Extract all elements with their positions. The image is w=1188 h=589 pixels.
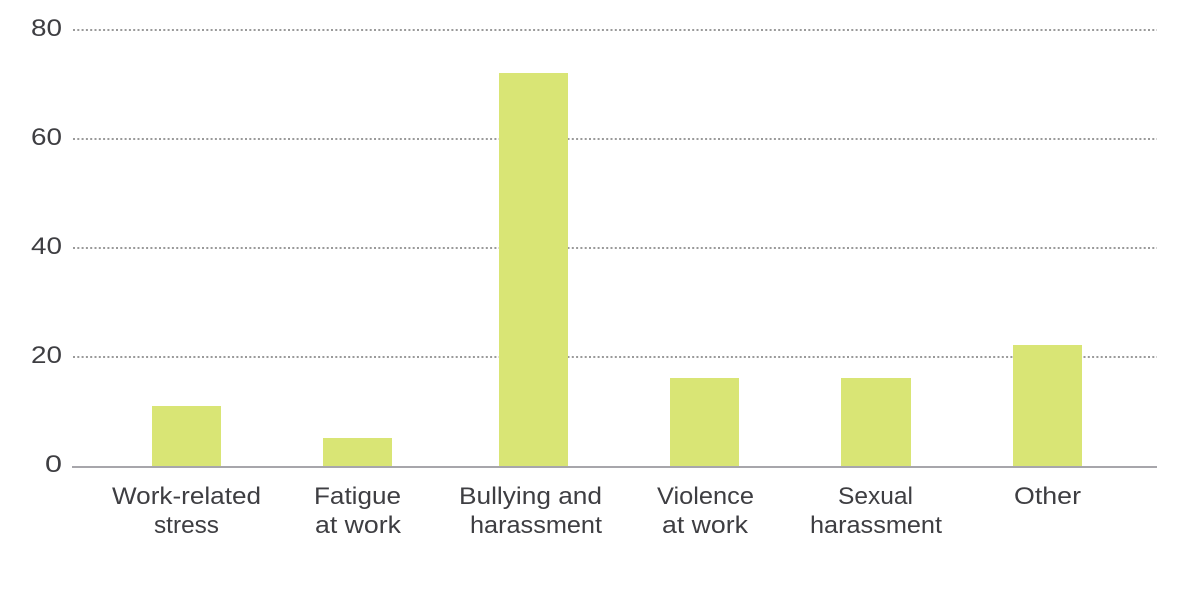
y-axis labels xyxy=(31,15,62,478)
x-axis labels: Work-related xyxy=(112,483,261,510)
bars xyxy=(152,73,1082,466)
x-axis labels: at work xyxy=(662,512,749,539)
y-axis labels: 20 xyxy=(31,342,62,369)
x-axis labels: Other xyxy=(1014,483,1081,510)
y-axis labels: 40 xyxy=(31,233,62,260)
x-axis labels: harassment xyxy=(810,512,942,539)
y-axis labels: 0 xyxy=(45,451,62,478)
x-axis labels: Bullying and xyxy=(459,483,602,510)
x-axis labels: harassment xyxy=(470,512,602,539)
y-axis labels: 80 xyxy=(31,15,62,42)
x-axis labels: Sexual xyxy=(838,483,913,510)
x-axis labels: at work xyxy=(315,512,402,539)
x-axis labels xyxy=(112,483,1081,539)
x-axis labels: Violence xyxy=(657,483,754,510)
x-axis baseline xyxy=(72,466,1157,468)
x-axis labels: stress xyxy=(154,512,219,539)
x-axis labels: Fatigue xyxy=(314,483,401,510)
y-axis labels: 60 xyxy=(31,124,62,151)
